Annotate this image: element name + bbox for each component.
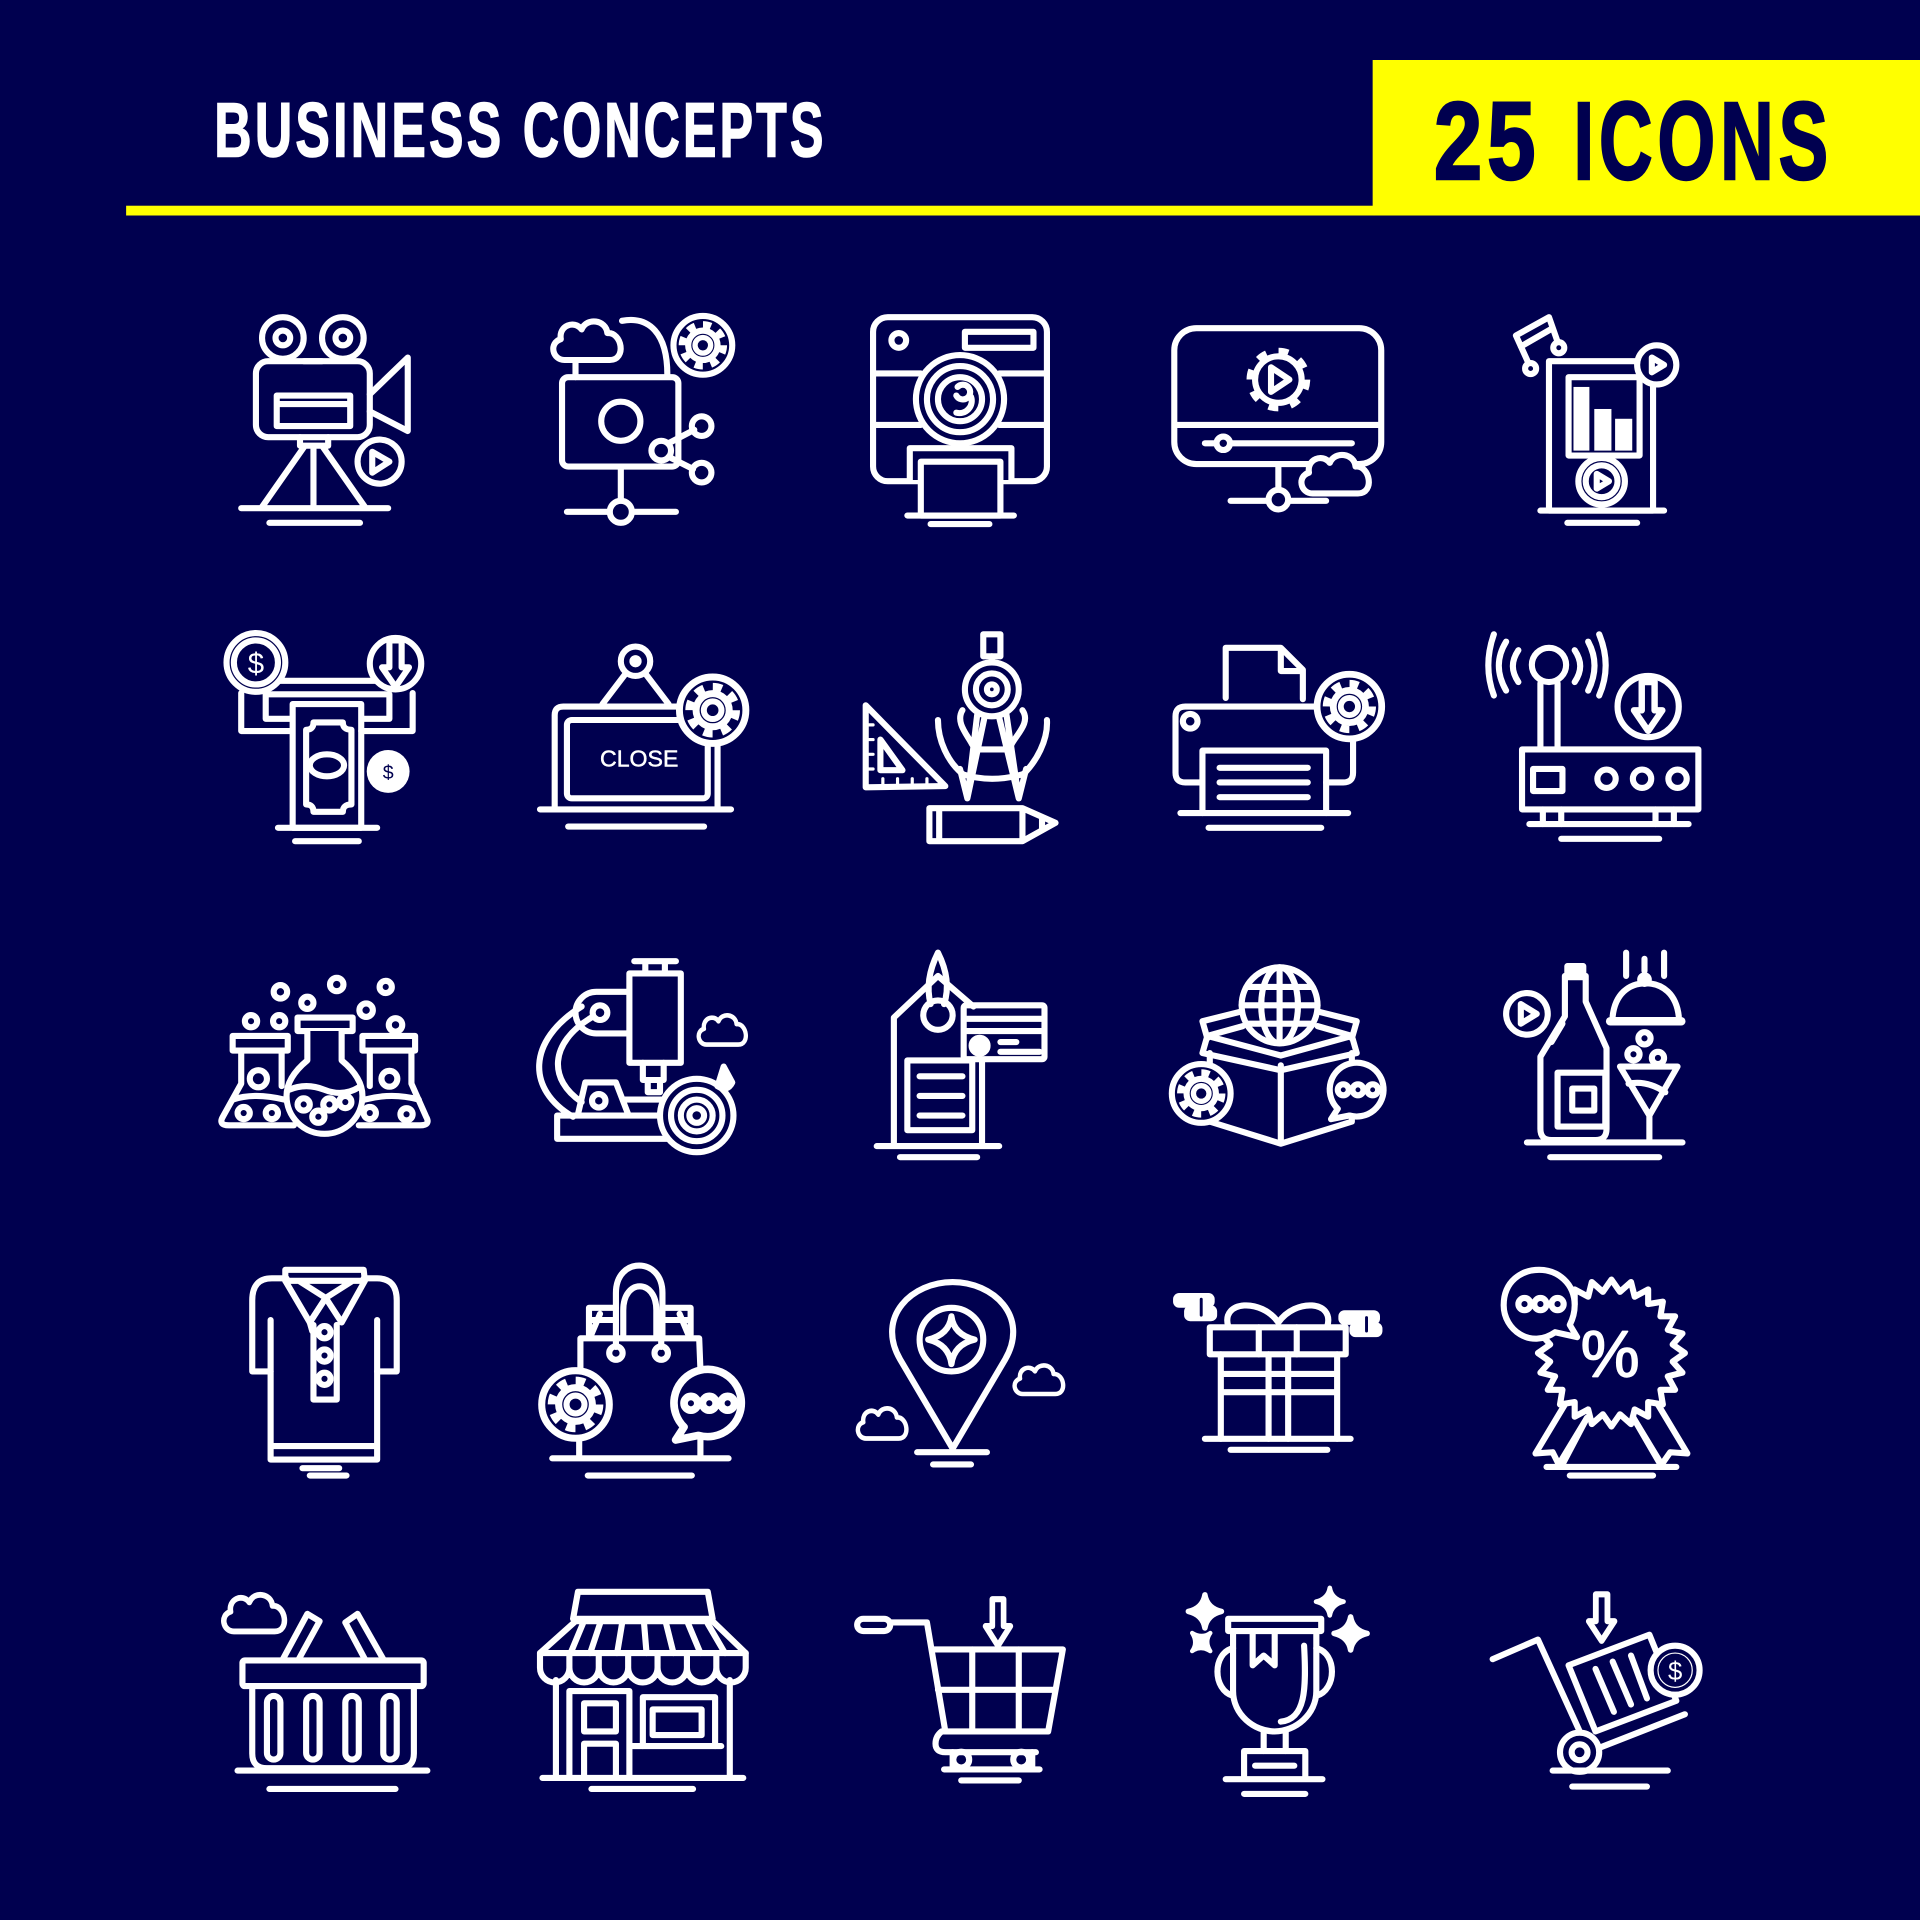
icon: wifi router with download xyxy=(1488,634,1698,839)
text: percent sign: % xyxy=(1581,1317,1640,1391)
icon: discount badge xyxy=(1504,1270,1687,1476)
badge text: 25 icons xyxy=(1434,80,1833,203)
icon: music player xyxy=(1516,317,1676,523)
icon: shopping basket with cloud xyxy=(224,1595,427,1789)
icon: close sign xyxy=(540,647,746,827)
icon: wine, glass and cloche xyxy=(1506,953,1682,1157)
icon: trophy with sparkles xyxy=(1183,1588,1367,1794)
yellow header rule xyxy=(126,206,1375,216)
icon: gift box xyxy=(1173,1293,1382,1450)
icon: instant camera xyxy=(873,317,1047,524)
icon: ATM cash withdrawal: $ xyxy=(248,647,264,680)
icon: price tag with credit card xyxy=(877,953,1044,1157)
badge text: 25 icons: 25 xyxy=(1434,80,1540,203)
icon: polo shirt xyxy=(252,1270,397,1476)
icon: video monitor with gear and cloud xyxy=(1174,328,1381,509)
icon: chemistry flasks xyxy=(221,978,428,1134)
icon: microscope with target xyxy=(539,961,746,1152)
icon: storefront xyxy=(540,1592,746,1789)
icon: ATM cash withdrawal: $ xyxy=(383,762,394,784)
icon: location pin with clouds xyxy=(858,1282,1063,1464)
title: BUSINESS xyxy=(214,88,504,174)
yellow badge panel xyxy=(1373,60,1920,216)
icon: cloud network lock with gear xyxy=(553,316,732,523)
icon: drafting tools xyxy=(866,634,1056,841)
text: close: CLOSE xyxy=(600,746,678,772)
title: CONCEPTS xyxy=(523,88,827,174)
icon: printer with gear xyxy=(1176,648,1382,828)
icon: ATM cash withdrawal xyxy=(227,633,421,841)
icon: shopping cart xyxy=(857,1599,1063,1780)
icon: film camera on tripod xyxy=(241,317,408,523)
icon: hand truck with box and coin: $ xyxy=(1668,1658,1682,1686)
icon: shopping bag xyxy=(542,1266,741,1476)
icon: hand truck with box and coin xyxy=(1493,1594,1700,1787)
icon: globe in box xyxy=(1172,967,1384,1144)
